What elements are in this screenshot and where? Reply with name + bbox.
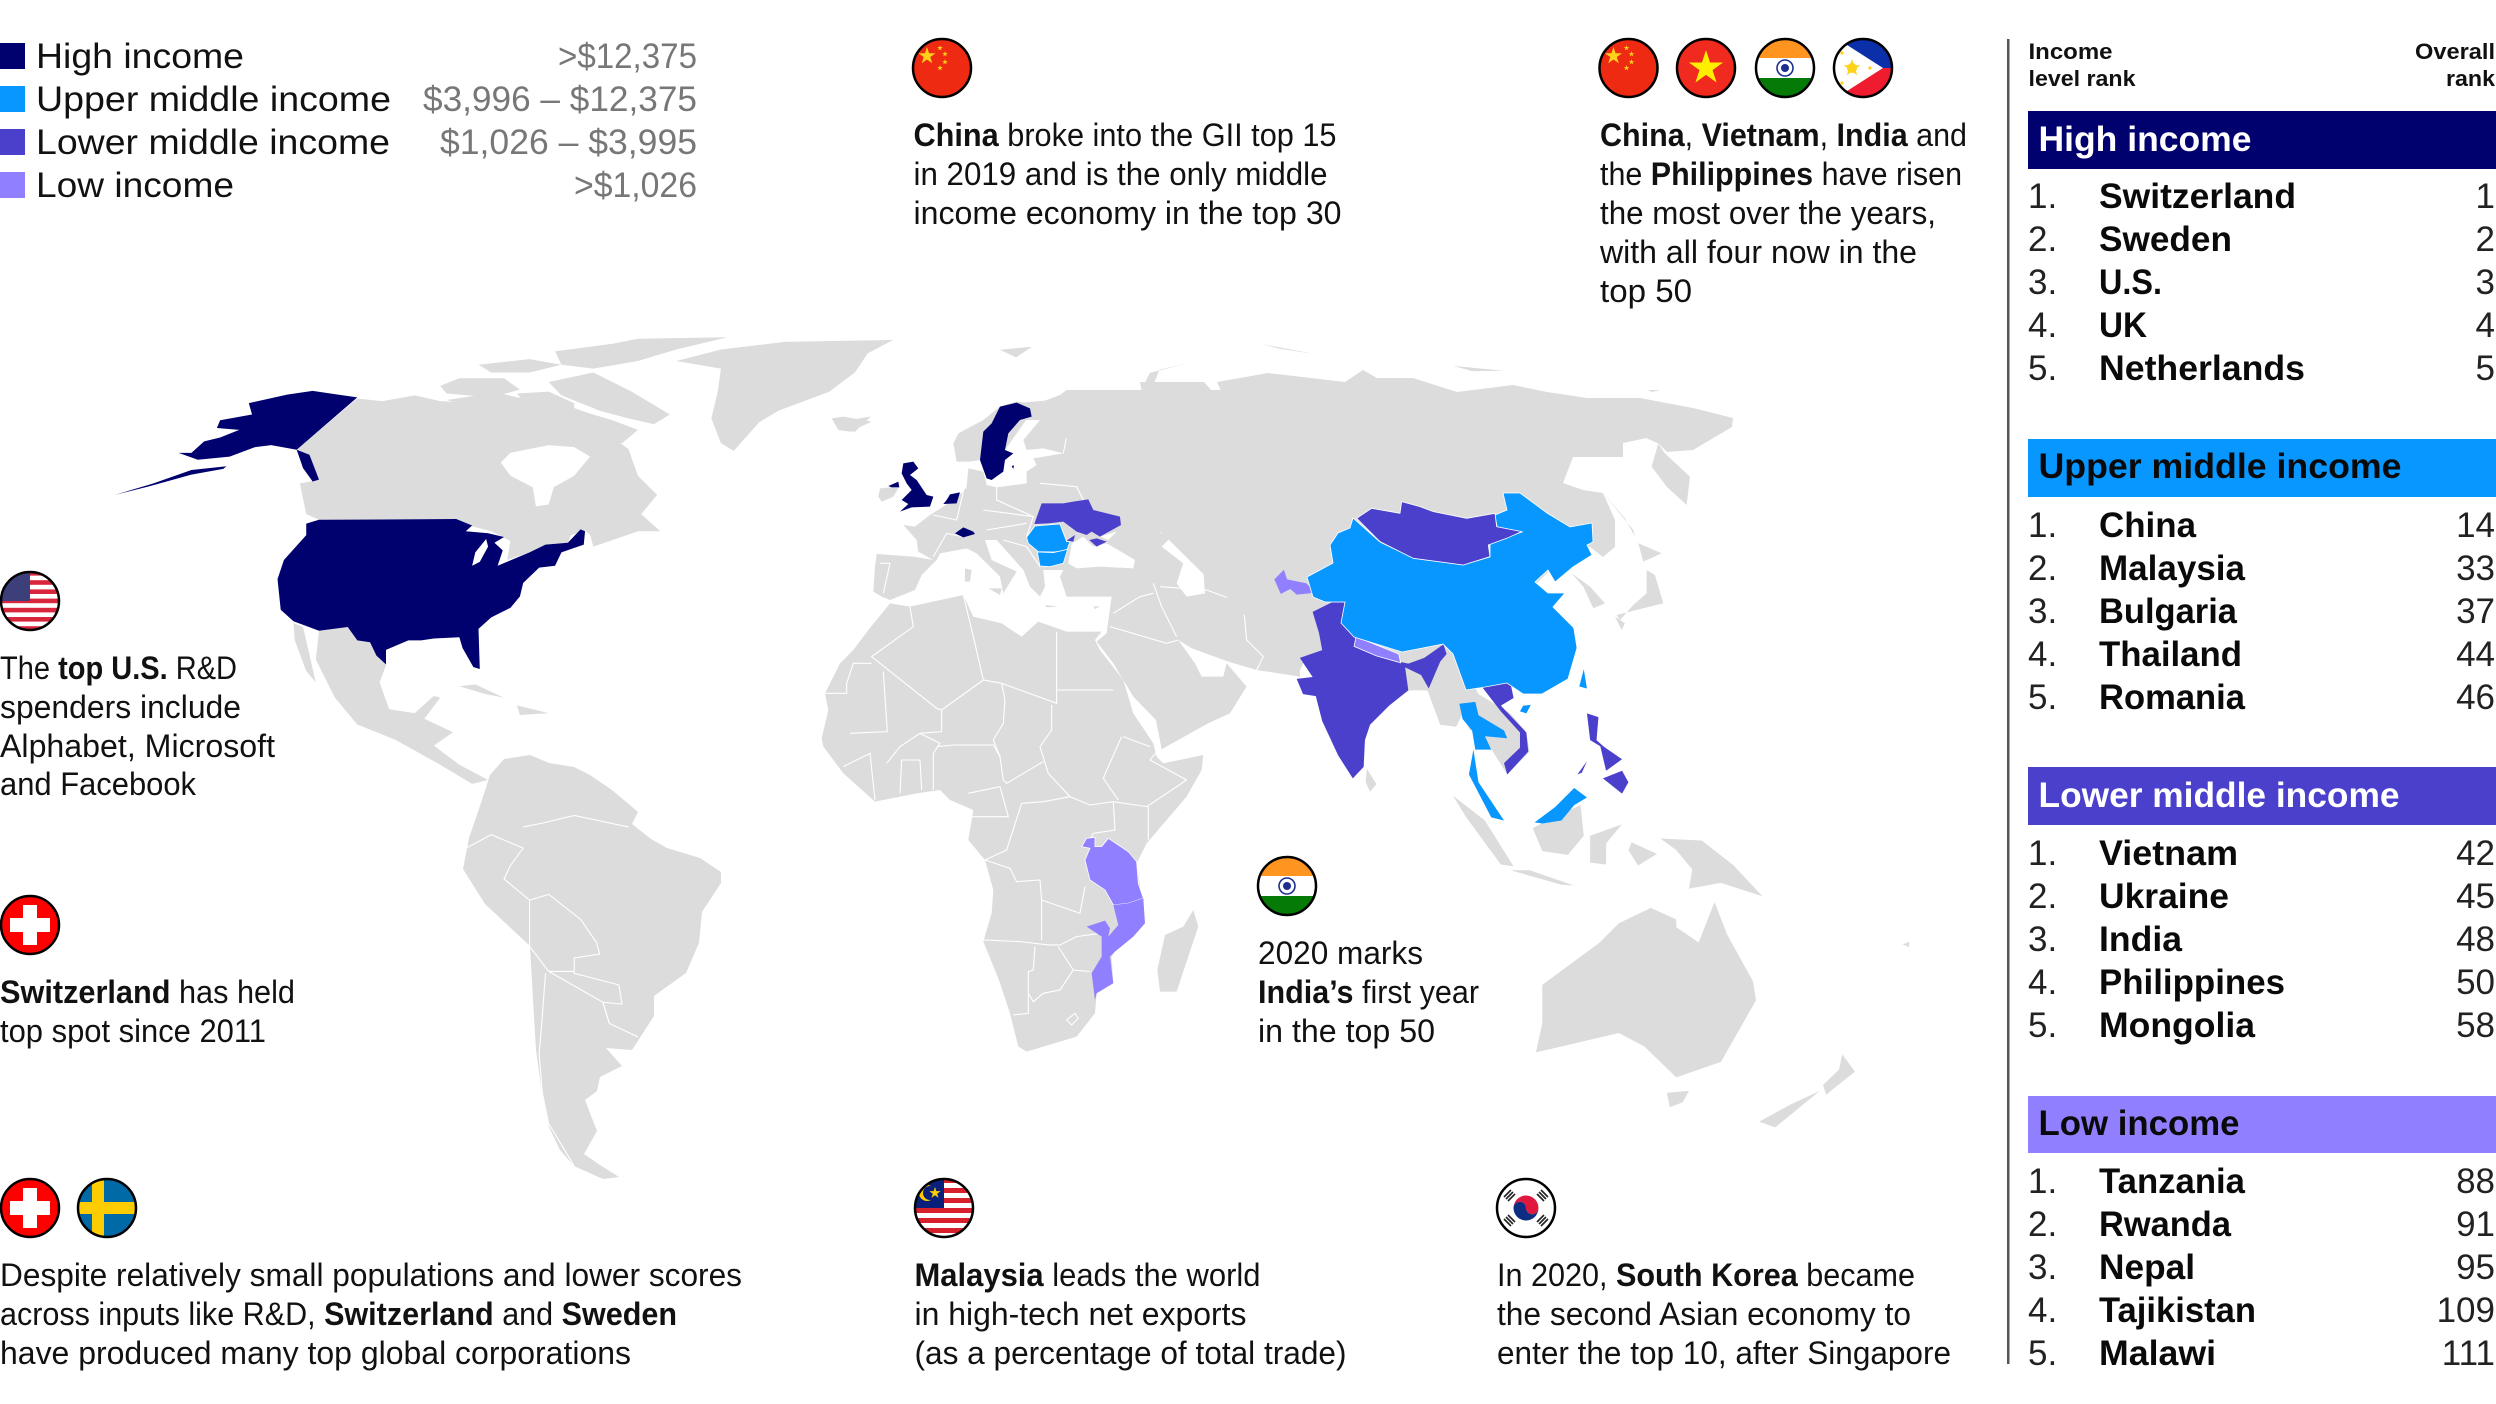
table: upper middle income: 4.: [2028, 635, 2057, 674]
table: upper middle income: 5.: [2028, 678, 2057, 717]
table: upper middle income: 2.: [2028, 549, 2057, 588]
annotation: risers China Vietnam India Philippines: the most over the years,: [1600, 195, 1936, 231]
table: low income: Tajikistan: [2099, 1291, 2256, 1330]
column heading: overall rank: Overall: [2415, 39, 2495, 64]
annotation: Switzerland and Sweden corporations: [0, 1178, 742, 1371]
country: Malaysia (Borneo): [1535, 788, 1587, 824]
annotation: China top 15: income economy in the top 30: [914, 195, 1342, 231]
annotation: Switzerland top spot: [0, 895, 295, 1049]
table: upper middle income: Bulgaria: [2099, 592, 2238, 631]
legend row: lower middle income: $1,026 – $3,995: [440, 123, 697, 162]
column heading: overall rank: rank: [2446, 66, 2496, 91]
table: high income: 4: [2476, 306, 2495, 345]
map: Oceania: [1536, 839, 1909, 1127]
map: South America: [463, 755, 721, 1179]
table: low income: Nepal: [2099, 1248, 2195, 1287]
flag: Philippines: [1833, 36, 1893, 100]
table: lower middle income: Mongolia: [2099, 1006, 2256, 1045]
country: Mongolia: [1357, 502, 1522, 565]
table: high income: Sweden: [2099, 220, 2232, 259]
country: Vietnam: [1482, 683, 1528, 775]
header bar: low income: [2028, 1096, 2496, 1153]
header bar: upper middle income: Upper middle income: [2038, 447, 2402, 486]
country: Romania: [1027, 524, 1070, 552]
flag: China: [1598, 38, 1658, 98]
flag: South Korea: [1497, 1179, 1555, 1237]
header bar: high income: High income: [2038, 120, 2252, 159]
legend row: upper middle income: Upper middle income: [36, 80, 391, 119]
legend row: upper middle income: $3,996 – $12,375: [423, 80, 697, 119]
world map: [115, 337, 1909, 1179]
country: Taiwan: [1579, 669, 1587, 688]
header bar: upper middle income: [2028, 439, 2496, 497]
annotation: risers China Vietnam India Philippines: the Philippines have risen: [1600, 156, 1962, 192]
annotation: South Korea top 10: [1497, 1179, 1951, 1371]
country: Tajikistan: [1274, 570, 1316, 595]
table: lower middle income: 42: [2456, 834, 2495, 873]
country: Hainan: [1520, 705, 1531, 713]
table: high income: 2: [2476, 220, 2495, 259]
flag: Malaysia: [914, 1178, 974, 1238]
table: high income: [2028, 111, 2496, 388]
legend row: high income: >$12,375: [558, 37, 697, 76]
legend row: lower middle income: [0, 123, 697, 162]
table: high income: 3: [2476, 263, 2495, 302]
legend row: low income: >$1,026: [574, 166, 697, 205]
map: Russia and Central Asia: [1033, 370, 1733, 720]
table: high income: Switzerland: [2099, 177, 2296, 216]
table: low income: Rwanda: [2099, 1205, 2232, 1244]
annotation: top U.S. R&D spenders: Alphabet, Microsoft: [0, 728, 275, 764]
country: Nepal: [1354, 637, 1401, 663]
column heading: income level rank: Income: [2028, 39, 2112, 64]
table: lower middle income: India: [2099, 920, 2183, 959]
flag: Vietnam: [1676, 38, 1736, 98]
annotation: China top 15: [912, 38, 1342, 231]
map: Europe and Western Asia: [832, 390, 1300, 749]
header bar: low income: Low income: [2038, 1104, 2240, 1143]
table: lower middle income: 4.: [2028, 963, 2057, 1002]
map: South and South-East Asia: [1274, 570, 1628, 887]
annotation: top U.S. R&D spenders: The top U.S. R&D: [0, 650, 237, 686]
table: low income: 3.: [2028, 1248, 2057, 1287]
annotation: China top 15: China broke into the GII top 15: [914, 117, 1336, 153]
table: low income: 4.: [2028, 1291, 2057, 1330]
table: low income: [2028, 1096, 2496, 1373]
column heading: income level rank: [2028, 39, 2136, 91]
table: upper middle income: Thailand: [2099, 635, 2242, 674]
annotation: India top 50: India’s first year: [1258, 974, 1479, 1010]
table: upper middle income: China: [2099, 506, 2197, 545]
table: high income: 3.: [2028, 263, 2057, 302]
flag: India: [1755, 38, 1815, 98]
annotation: India top 50: in the top 50: [1258, 1013, 1435, 1049]
table: lower middle income: 2.: [2028, 877, 2057, 916]
panel: income level rankings sidebar: [2007, 39, 2496, 1373]
annotation: South Korea top 10: enter the top 10, after Singapore: [1497, 1335, 1951, 1371]
table: lower middle income: 5.: [2028, 1006, 2057, 1045]
table: lower middle income: 1.: [2028, 834, 2057, 873]
table: upper middle income: 33: [2456, 549, 2495, 588]
flag: United States: [0, 571, 60, 631]
legend row: high income: High income: [36, 37, 244, 76]
table: high income: 1: [2476, 177, 2495, 216]
country: Switzerland: [955, 527, 975, 537]
legend row: low income: Low income: [36, 166, 234, 205]
table: low income: 2.: [2028, 1205, 2057, 1244]
map: Arctic islands of Eurasia: [1000, 344, 1504, 392]
annotation: Switzerland top spot: Switzerland has held: [0, 974, 295, 1010]
annotation: Switzerland and Sweden corporations: have produced many top global corporations: [0, 1335, 631, 1371]
country: Thailand: [1459, 702, 1507, 820]
country: United States: [115, 391, 585, 669]
legend row: lower middle income: Lower middle income: [36, 123, 390, 162]
table: upper middle income: [2028, 439, 2496, 717]
table: upper middle income: 37: [2456, 592, 2495, 631]
header bar: lower middle income: Lower middle income: [2038, 776, 2400, 815]
table: low income: 91: [2456, 1205, 2495, 1244]
header bar: lower middle income: [2028, 767, 2496, 825]
table: high income: 5: [2476, 349, 2495, 388]
country: Mozambique: [1087, 898, 1145, 1000]
annotation: top U.S. R&D spenders: [0, 571, 275, 802]
legend: income levels: [0, 37, 697, 205]
annotation: risers China Vietnam India Philippines: top 50: [1600, 273, 1692, 309]
country: Bulgaria: [1037, 549, 1068, 567]
table: upper middle income: Romania: [2099, 678, 2246, 717]
table: low income: Malawi: [2099, 1334, 2216, 1373]
table: upper middle income: 46: [2456, 678, 2495, 717]
table: low income: 95: [2456, 1248, 2495, 1287]
table: low income: Tanzania: [2099, 1162, 2246, 1201]
column heading: income level rank: level rank: [2028, 66, 2136, 91]
annotation: Switzerland top spot: top spot since 2011: [0, 1013, 266, 1049]
flag: Sweden: [77, 1178, 137, 1238]
table: high income: UK: [2099, 306, 2147, 345]
flag: India: [1257, 856, 1317, 916]
annotation: Switzerland and Sweden corporations: Despite relatively small populations and lower scores: [0, 1257, 742, 1293]
annotation: risers China Vietnam India Philippines: with all four now in the: [1599, 234, 1917, 270]
country: United Kingdom: [888, 462, 933, 512]
annotation: India top 50: 2020 marks: [1258, 935, 1423, 971]
table: lower middle income: [2028, 767, 2496, 1045]
table: upper middle income: 3.: [2028, 592, 2057, 631]
table: lower middle income: Philippines: [2099, 963, 2285, 1002]
annotation: Malaysia high-tech exports: in high-tech net exports: [914, 1296, 1246, 1332]
table: low income: 1.: [2028, 1162, 2057, 1201]
table: lower middle income: Ukraine: [2099, 877, 2229, 916]
table: high income: 4.: [2028, 306, 2057, 345]
country: Sweden: [980, 403, 1032, 480]
table: low income: 88: [2456, 1162, 2495, 1201]
table: lower middle income: 45: [2456, 877, 2495, 916]
table: low income: 109: [2437, 1291, 2495, 1330]
country: Tanzania: [1082, 837, 1143, 905]
annotation: Malaysia high-tech exports: Malaysia leads the world: [914, 1257, 1260, 1293]
map: North America: [115, 337, 893, 784]
annotation: South Korea top 10: In 2020, South Korea became: [1497, 1257, 1915, 1293]
annotation: Malaysia high-tech exports: [914, 1178, 1346, 1371]
table: lower middle income: 50: [2456, 963, 2495, 1002]
table: low income: 5.: [2028, 1334, 2057, 1373]
table: upper middle income: Malaysia: [2099, 549, 2246, 588]
legend row: high income: [0, 37, 697, 76]
annotation: top U.S. R&D spenders: and Facebook: [0, 766, 197, 802]
legend row: upper middle income: [0, 80, 697, 119]
country: Philippines: [1577, 713, 1628, 794]
country: Ukraine: [1034, 499, 1121, 547]
flag: China: [912, 38, 972, 98]
flag: Switzerland: [0, 895, 60, 955]
country: China: [1307, 493, 1593, 694]
table: low income: 111: [2442, 1334, 2495, 1373]
table: high income: U.S.: [2099, 263, 2162, 302]
annotation: Switzerland and Sweden corporations: across inputs like R&D, Switzerland and Sweden: [0, 1296, 677, 1332]
table: upper middle income: 44: [2456, 635, 2495, 674]
table: high income: 5.: [2028, 349, 2057, 388]
annotation: India top 50: [1257, 856, 1479, 1049]
annotation: top U.S. R&D spenders: spenders include: [0, 689, 241, 725]
column heading: overall rank: [2415, 39, 2496, 91]
table: lower middle income: Vietnam: [2099, 834, 2238, 873]
country: Netherlands: [943, 492, 960, 504]
table: high income: 2.: [2028, 220, 2057, 259]
table: high income: Netherlands: [2099, 349, 2305, 388]
annotation: risers China Vietnam India Philippines: [1598, 36, 1967, 309]
annotation: Malaysia high-tech exports: (as a percentage of total trade): [914, 1335, 1346, 1371]
header bar: high income: [2028, 111, 2496, 169]
legend row: low income: [0, 166, 697, 205]
map: East Asia: [1357, 390, 1690, 630]
table: high income: 1.: [2028, 177, 2057, 216]
country: India: [1297, 602, 1447, 778]
flag: Switzerland: [0, 1178, 60, 1238]
annotation: risers China Vietnam India Philippines: China, Vietnam, India and: [1600, 117, 1967, 153]
table: lower middle income: 58: [2456, 1006, 2495, 1045]
table: lower middle income: 3.: [2028, 920, 2057, 959]
annotation: China top 15: in 2019 and is the only middle: [914, 156, 1328, 192]
annotation: South Korea top 10: the second Asian economy to: [1497, 1296, 1911, 1332]
map: Africa: [822, 595, 1203, 1052]
table: upper middle income: 14: [2456, 506, 2495, 545]
table: lower middle income: 48: [2456, 920, 2495, 959]
table: upper middle income: 1.: [2028, 506, 2057, 545]
